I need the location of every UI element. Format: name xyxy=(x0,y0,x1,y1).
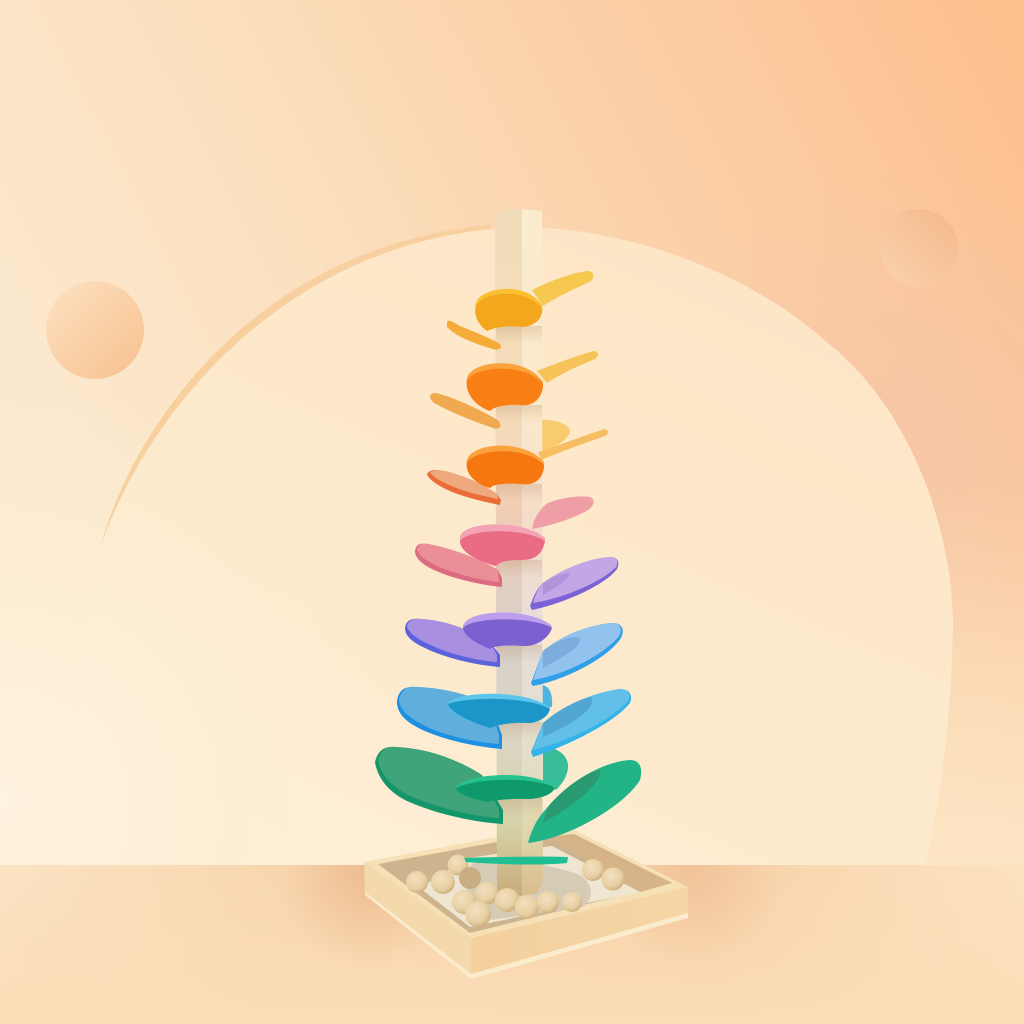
right paddle xyxy=(532,271,593,306)
dome backdrop xyxy=(60,227,953,866)
thin green bottom disc xyxy=(464,857,568,865)
back leaves behind post xyxy=(538,420,570,790)
tray inner right wall xyxy=(552,834,672,892)
tray bottom edge xyxy=(365,892,688,979)
back blue disc xyxy=(542,685,552,708)
lower right leaf shadow xyxy=(543,697,592,737)
background circle left xyxy=(46,281,144,379)
row 1: yellow paddles and disc xyxy=(447,271,593,350)
tray left face xyxy=(364,862,471,978)
front disc xyxy=(467,363,543,411)
front disc xyxy=(467,446,544,488)
right leaf xyxy=(530,557,618,610)
wooden post xyxy=(495,209,543,896)
row 4: pink leaves and disc xyxy=(415,496,594,587)
right leaf shadow xyxy=(543,770,600,823)
left paddle xyxy=(447,321,501,350)
front disc xyxy=(460,524,545,566)
left leaf xyxy=(405,619,500,667)
front balls xyxy=(406,867,582,927)
left leaf xyxy=(427,470,501,505)
right paddle xyxy=(537,351,598,383)
shadow on leaf xyxy=(543,573,570,595)
tray right face xyxy=(471,887,688,975)
row 3: orange leaves and disc xyxy=(427,429,608,505)
floor xyxy=(0,865,1024,1024)
background circle right xyxy=(880,209,958,287)
tray inner cavity xyxy=(378,834,672,933)
left leaf xyxy=(397,687,502,749)
row 5: purple leaves and disc xyxy=(405,557,618,667)
front disc xyxy=(448,694,550,728)
right paddle xyxy=(538,429,608,460)
tray sand floor xyxy=(420,846,640,927)
upper right leaf xyxy=(531,623,623,686)
row 7: green leaves and disc xyxy=(375,747,641,843)
tray rim xyxy=(364,829,688,938)
back balls xyxy=(448,854,624,890)
wooden tray base xyxy=(364,829,688,979)
left paddle xyxy=(430,393,501,429)
row 2: orange paddles and disc xyxy=(430,351,598,429)
lower right leaf xyxy=(531,689,631,757)
right leaf xyxy=(532,496,594,529)
sand mound xyxy=(465,861,591,920)
front disc xyxy=(456,775,555,802)
front disc xyxy=(463,612,552,649)
back amber disc xyxy=(538,420,570,452)
upper right leaf shadow xyxy=(543,637,580,668)
post shadows under discs xyxy=(496,326,542,344)
right leaf xyxy=(528,760,641,843)
back green disc xyxy=(543,747,568,790)
lower left glow xyxy=(0,380,420,866)
arc line xyxy=(100,225,490,548)
row 6: blue leaves and disc xyxy=(397,623,631,757)
front disc xyxy=(475,289,542,331)
left leaf xyxy=(415,544,502,587)
left leaf xyxy=(375,747,503,824)
